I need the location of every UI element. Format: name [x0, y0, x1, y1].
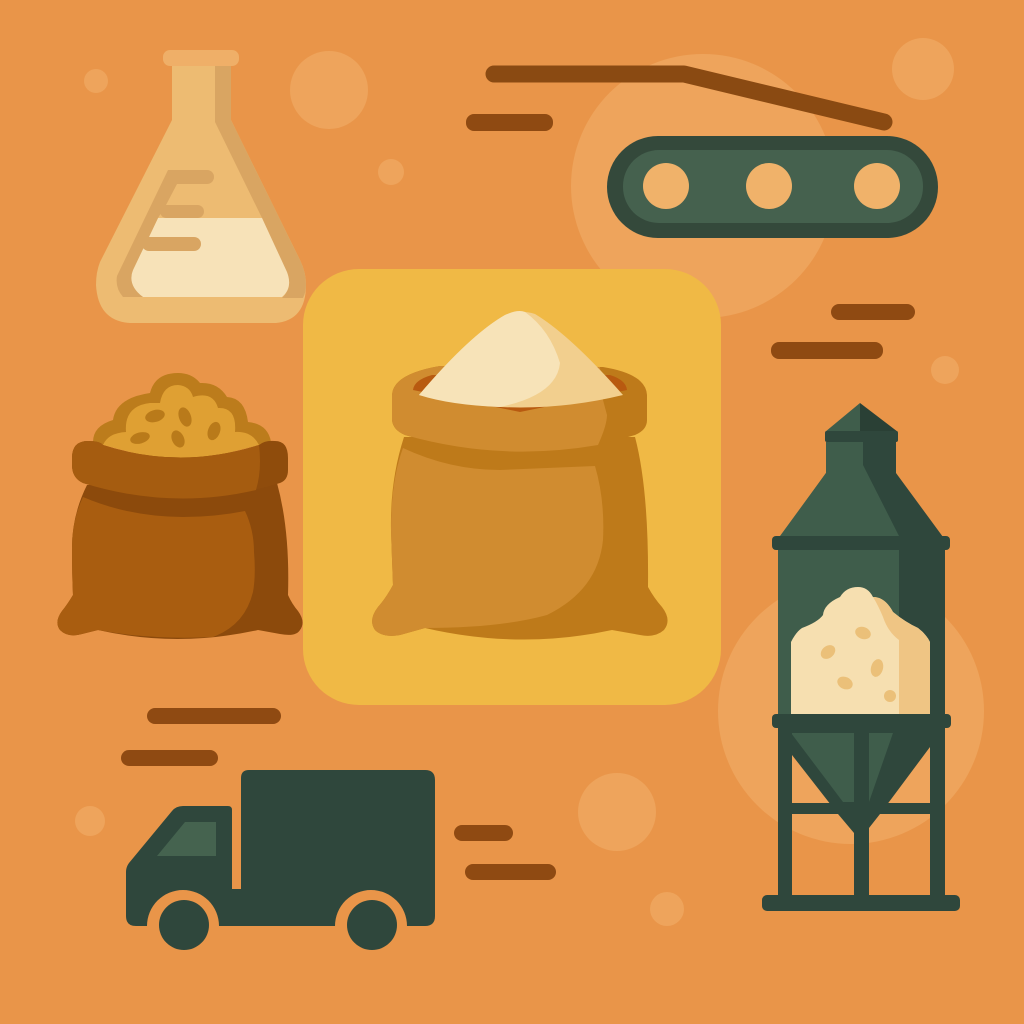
icon: grain silo — [762, 403, 960, 911]
grain heap — [93, 373, 271, 465]
icon: conveyor belt — [494, 74, 938, 238]
icon: grain sack — [57, 373, 303, 639]
icon: conical flask — [96, 50, 306, 323]
icon: delivery truck — [126, 770, 435, 950]
motion dashes — [121, 114, 915, 880]
silo grain pile — [791, 587, 930, 715]
background circles — [75, 38, 984, 926]
silo hopper and legs — [762, 714, 960, 911]
panel: central flour sack — [303, 269, 721, 705]
